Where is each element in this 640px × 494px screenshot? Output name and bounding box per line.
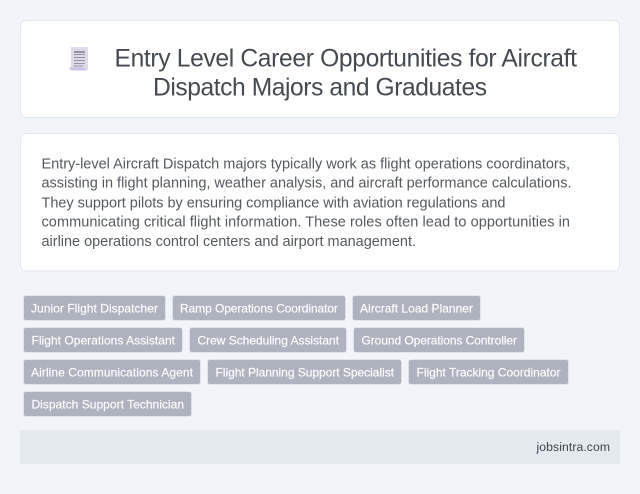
footer: [20, 430, 620, 464]
tag list: [24, 296, 568, 416]
tag: Dispatch Support Technician: [24, 392, 192, 416]
text block: description: [42, 156, 572, 250]
tag: Flight Planning Support Specialist: Flight Planning Support Specialist: [216, 366, 395, 380]
tag: Ramp Operations Coordinator: Ramp Operations Coordinator: [180, 302, 338, 316]
text block: description: airline operations control centers and airport management.: [42, 234, 416, 250]
panel: description: [20, 134, 620, 271]
text block: description: Entry-level Aircraft Dispatch majors typically work as flight operations coordinators,: [42, 156, 570, 172]
tag: Aircraft Load Planner: Aircraft Load Planner: [360, 302, 473, 316]
text block: description: assisting in flight planning, weather analysis, and aircraft performance calculations.: [42, 176, 572, 192]
panel: header: [20, 20, 620, 118]
tag: Airline Communications Agent: [24, 360, 200, 384]
tag: Flight Tracking Coordinator: Flight Tracking Coordinator: [416, 366, 560, 380]
text block: description: communicating critical flight information. These roles often lead to opportunities in: [42, 214, 570, 230]
icon: document scroll: [69, 47, 88, 70]
footer text: source: jobsintra.com: [536, 440, 610, 454]
title: Dispatch Majors and Graduates: [153, 75, 487, 102]
title: [114, 46, 577, 102]
tag: Dispatch Support Technician: Dispatch Support Technician: [32, 398, 184, 412]
tag: Ramp Operations Coordinator: [172, 296, 346, 320]
title: Entry Level Career Opportunities for Aircraft: [114, 46, 577, 73]
tag: Ground Operations Controller: [354, 328, 524, 352]
tag: Airline Communications Agent: Airline Communications Agent: [31, 366, 194, 380]
tag: Crew Scheduling Assistant: Crew Scheduling Assistant: [198, 334, 340, 348]
tag: Flight Operations Assistant: Flight Operations Assistant: [32, 334, 176, 348]
tag: Aircraft Load Planner: [352, 296, 480, 320]
tag: Flight Planning Support Specialist: [208, 360, 402, 384]
tag: Flight Operations Assistant: [24, 328, 182, 352]
tag: Junior Flight Dispatcher: Junior Flight Dispatcher: [31, 302, 158, 316]
tag: Flight Tracking Coordinator: [408, 360, 568, 384]
text block: description: They support pilots by ensuring compliance with aviation regulations and: [42, 195, 506, 211]
tag: Crew Scheduling Assistant: [190, 328, 346, 352]
tag: Junior Flight Dispatcher: [24, 296, 166, 320]
tag: Ground Operations Controller: Ground Operations Controller: [362, 334, 517, 348]
